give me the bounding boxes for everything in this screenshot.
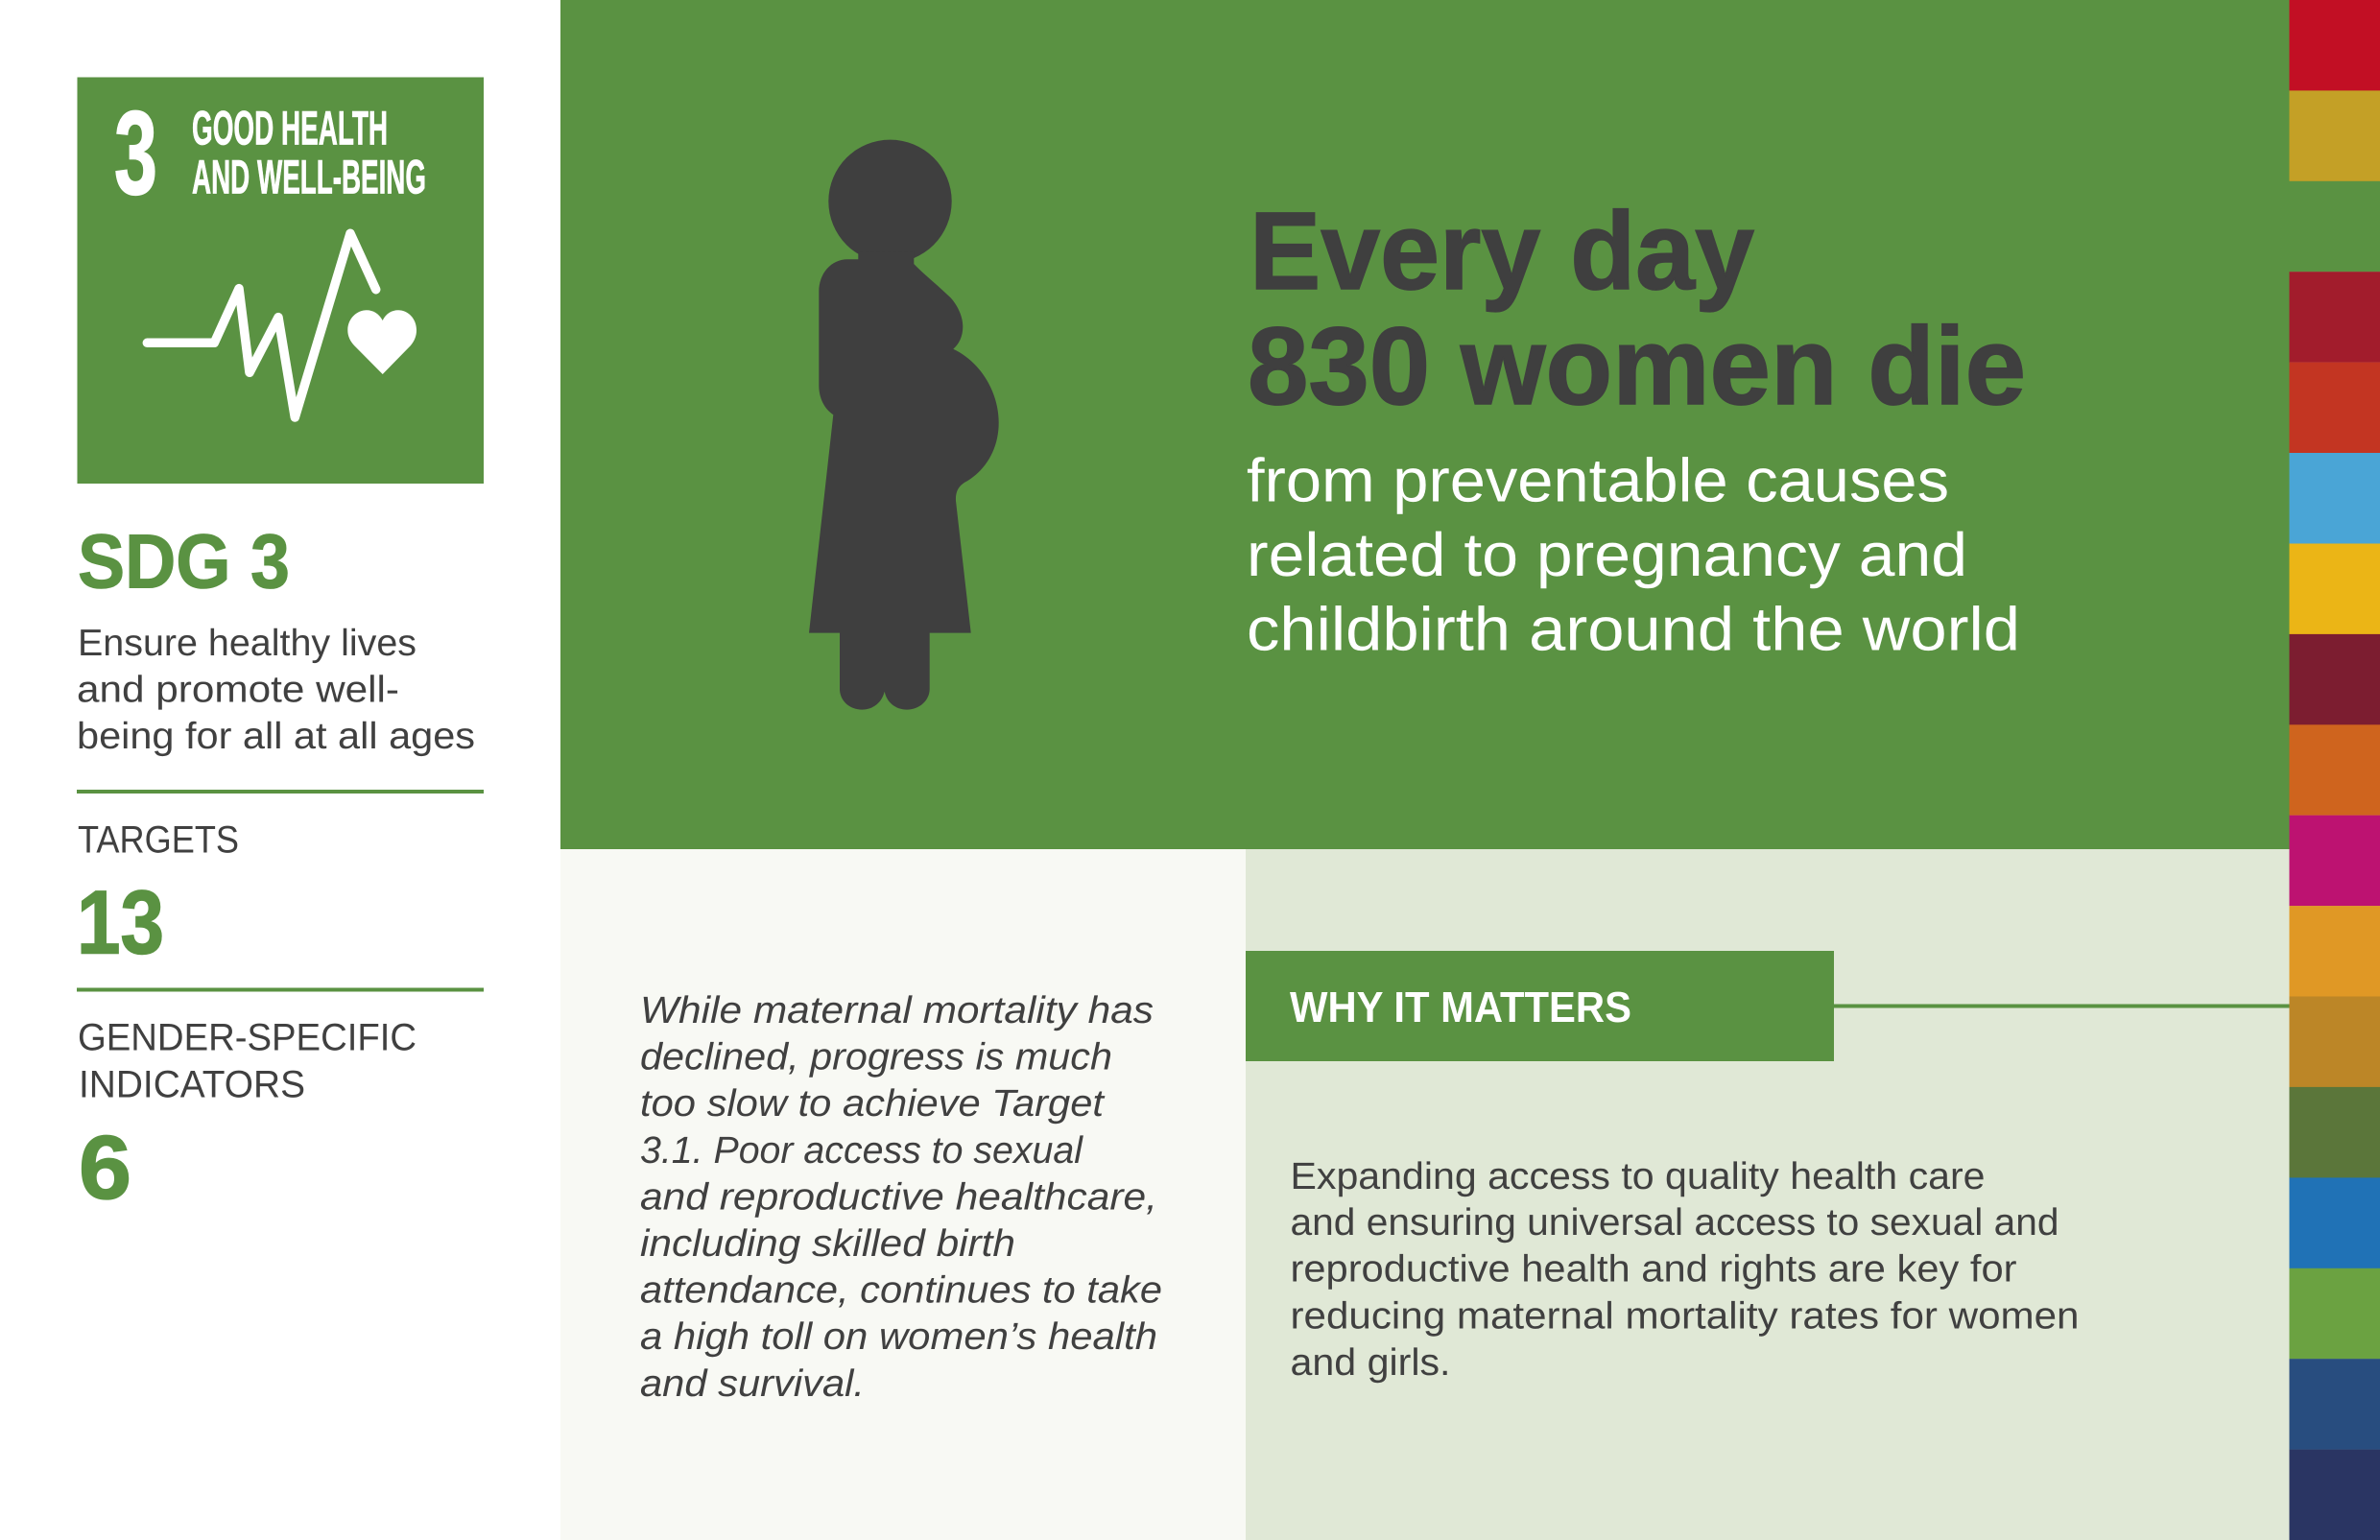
icon: heartbeat line bbox=[147, 233, 376, 417]
panel: light italic note background bbox=[560, 849, 1246, 1540]
text block: italic note: attendance, continues to take bbox=[640, 1268, 1162, 1311]
headline bbox=[1248, 190, 2026, 428]
icon: pregnant woman silhouette bbox=[809, 140, 999, 710]
text block: italic note: and reproductive healthcare, bbox=[640, 1176, 1157, 1219]
SDG description: being for all at all ages bbox=[77, 716, 475, 757]
text block: why it matters body: and girls. bbox=[1290, 1341, 1451, 1384]
text block: italic note: a high toll on women’s health bbox=[640, 1315, 1157, 1358]
SDG heading: SDG 3 bbox=[78, 519, 290, 604]
headline: 830 women die bbox=[1248, 305, 2026, 428]
subheading: related to pregnancy and bbox=[1247, 520, 1967, 589]
subheading bbox=[1247, 445, 2020, 664]
panel: why it matters background bbox=[1246, 849, 2290, 1540]
badge title: GOOD HEALTH bbox=[192, 102, 388, 155]
badge title: AND WELL-BEING bbox=[192, 150, 426, 203]
text block: why it matters body: reducing maternal mortality rates for women bbox=[1290, 1295, 2079, 1338]
panel: SDG sidebar bbox=[77, 77, 484, 1218]
text block: why it matters body: reproductive health and rights are key for bbox=[1290, 1247, 2017, 1290]
targets label: TARGETS bbox=[78, 819, 239, 862]
why it matters heading: WHY IT MATTERS bbox=[1290, 983, 1631, 1031]
panel: green hero bbox=[560, 0, 2290, 849]
text block: italic note: 3.1. Poor access to sexual bbox=[640, 1129, 1083, 1172]
text block: italic note: declined, progress is much bbox=[640, 1036, 1112, 1078]
connector line bbox=[1834, 1004, 2290, 1007]
text block: italic note bbox=[640, 989, 1162, 1405]
targets number: 13 bbox=[77, 871, 164, 973]
text block: why it matters body: and ensuring universal access to sexual and bbox=[1290, 1201, 2059, 1244]
text block: italic note: too slow to achieve Target bbox=[640, 1082, 1106, 1125]
text block: italic note: and survival. bbox=[640, 1362, 865, 1405]
text block: italic note: While maternal mortality has bbox=[640, 989, 1154, 1031]
why it matters heading bbox=[1246, 951, 1834, 1061]
text block: italic note: including skilled birth bbox=[640, 1222, 1015, 1265]
indicators label: INDICATORS bbox=[79, 1063, 305, 1105]
indicators number: 6 bbox=[79, 1117, 131, 1218]
badge title bbox=[192, 102, 426, 203]
badge number: 3 bbox=[114, 87, 157, 220]
headline: Every day bbox=[1250, 190, 1754, 313]
indicators label bbox=[78, 1017, 416, 1105]
divider bbox=[77, 988, 484, 992]
SDG 3 badge bbox=[77, 77, 484, 484]
subheading: childbirth around the world bbox=[1247, 595, 2020, 664]
text block: why it matters body bbox=[1290, 1155, 2079, 1384]
indicators label: GENDER-SPECIFIC bbox=[78, 1017, 416, 1059]
text block: why it matters body: Expanding access to quality health care bbox=[1290, 1155, 1985, 1197]
SDG description bbox=[77, 623, 475, 757]
icon: heart bbox=[347, 310, 416, 374]
SDG description: and promote well- bbox=[77, 670, 399, 711]
SDG description: Ensure healthy lives bbox=[78, 623, 416, 664]
SDG colour stripes bbox=[2290, 0, 2380, 1540]
subheading: from preventable causes bbox=[1247, 445, 1949, 514]
divider bbox=[77, 790, 484, 794]
